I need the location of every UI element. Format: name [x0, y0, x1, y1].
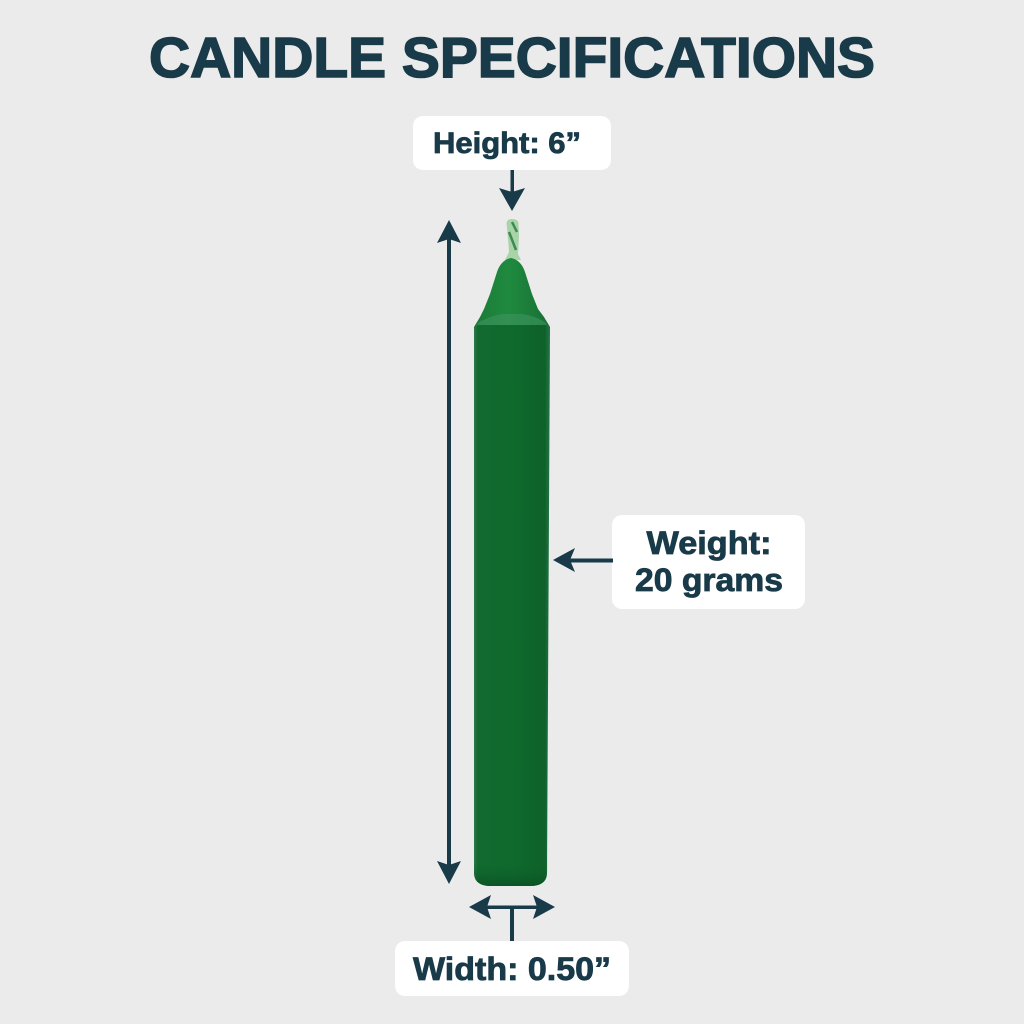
label: height: Height: 6”: [433, 127, 581, 160]
arrow: width dimension: [469, 895, 555, 941]
arrow: to candle side: [553, 548, 613, 572]
label: width: Width: 0.50”: [413, 951, 611, 987]
candle: [474, 219, 550, 886]
candle base shading: [474, 860, 548, 886]
arrow: to candle top: [499, 170, 525, 211]
candle wick: [505, 219, 521, 260]
arrow: height dimension: [437, 220, 461, 884]
candle tip: [474, 258, 550, 334]
label: weight: [612, 515, 805, 609]
candle shoulder highlight: [475, 314, 549, 329]
label: height: [413, 116, 611, 170]
candle body: [474, 325, 550, 886]
title: CANDLE SPECIFICATIONS: [149, 26, 875, 90]
label: weight: Weight:: [646, 525, 772, 561]
label: width: [395, 941, 629, 996]
label: weight: 20 grams: [635, 562, 783, 598]
